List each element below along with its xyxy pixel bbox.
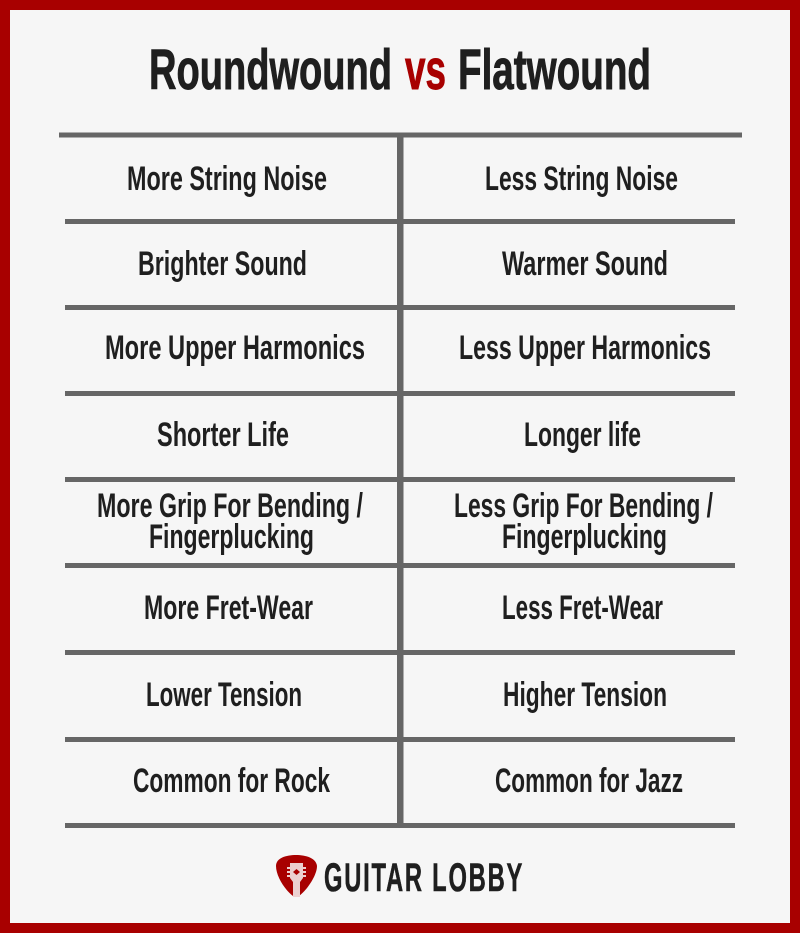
- title: Roundwound: [149, 38, 392, 102]
- column: flatwound: Common for Jazz: [495, 762, 683, 800]
- column: flatwound: Higher Tension: [503, 676, 667, 714]
- column: roundwound: [97, 160, 365, 800]
- comparison table grid: [59, 132, 742, 828]
- column: roundwound: More String Noise: [127, 160, 327, 198]
- icon: guitar pick with headstock: [276, 855, 317, 897]
- column: roundwound: Lower Tension: [146, 676, 302, 714]
- column: roundwound: Fingerplucking: [149, 518, 314, 556]
- title: vs: [405, 38, 446, 102]
- title: Flatwound: [458, 38, 651, 102]
- wordmark: GUITAR LOBBY: [324, 855, 524, 900]
- column: flatwound: Warmer Sound: [502, 245, 668, 283]
- column: roundwound: Common for Rock: [133, 762, 330, 800]
- column: flatwound: [454, 160, 713, 800]
- column: roundwound: Shorter Life: [157, 416, 289, 454]
- column: roundwound: More Grip For Bending /: [97, 487, 363, 525]
- column: flatwound: Longer life: [524, 416, 641, 454]
- column: flatwound: Less Fret-Wear: [502, 589, 663, 627]
- column: flatwound: Less String Noise: [485, 160, 678, 198]
- column: roundwound: Brighter Sound: [138, 245, 307, 283]
- column: roundwound: More Fret-Wear: [144, 589, 313, 627]
- column: flatwound: Fingerplucking: [502, 518, 667, 556]
- column: roundwound: More Upper Harmonics: [105, 329, 365, 367]
- logo: guitar lobby: [276, 855, 524, 900]
